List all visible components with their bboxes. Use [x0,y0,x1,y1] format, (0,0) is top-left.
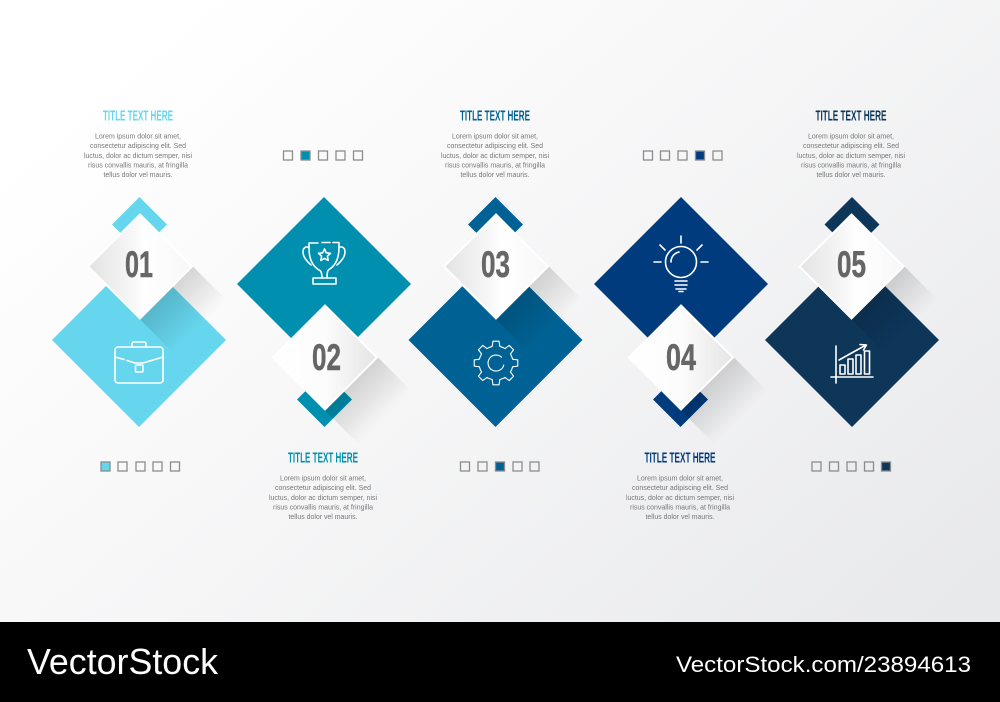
step 4 number: 04 [666,337,696,378]
step 1 title: TITLE TEXT HERE [103,108,173,124]
step 3 chevron [468,197,523,252]
step 4 description: risus convallis mauris, at fringilla [630,502,730,512]
step 5 description: risus convallis mauris, at fringilla [801,160,901,170]
step 3 description [441,132,549,179]
step 2 title: TITLE TEXT HERE [288,450,358,466]
step 2 large diamond [237,197,411,371]
step 1 chevron [112,197,167,252]
step 3 title: TITLE TEXT HERE [460,108,530,124]
step 2 description: consectetur adipiscing elit. Sed [275,483,371,492]
step 1 description: luctus, dolor ac dictum semper, nisi [84,151,192,160]
step 5 description: tellus dolor vel mauris. [816,170,886,179]
footer bar [0,622,1000,702]
step 5 chevron [824,197,880,252]
step 5 number: 05 [837,244,866,285]
footer logo: VectorStock [27,641,219,682]
icon: briefcase [115,342,163,383]
step 2 description [269,474,377,521]
step 5 description: Lorem ipsum dolor sit amet, [808,132,894,140]
step 2 chevron [297,372,352,427]
step 4 [594,151,768,521]
icon: trophy [303,242,345,284]
step 4 title: TITLE TEXT HERE [644,450,716,466]
step 5 [765,108,939,471]
step 5 description: luctus, dolor ac dictum semper, nisi [797,151,905,160]
step 3 description: tellus dolor vel mauris. [460,170,530,179]
step 1 description: consectetur adipiscing elit. Sed [90,141,186,150]
step 2 description: risus convallis mauris, at fringilla [273,502,373,512]
step 2 description: tellus dolor vel mauris. [288,512,358,521]
step 4 progress squares [644,151,722,160]
step 1 large diamond [52,253,226,427]
step 2 description: luctus, dolor ac dictum semper, nisi [269,493,377,502]
step 2 progress squares [284,151,362,160]
step 3 description: consectetur adipiscing elit. Sed [447,141,543,150]
step 2 number diamond [273,306,412,444]
step 5 title: TITLE TEXT HERE [816,108,886,124]
step 1 number: 01 [125,244,153,285]
step 2 description: Lorem ipsum dolor sit amet, [280,474,366,482]
step 3 number: 03 [481,244,510,285]
step 3 progress squares [460,462,539,471]
step 1 description [84,132,192,179]
step 1 progress squares [101,462,180,471]
step 3 description: risus convallis mauris, at fringilla [445,160,545,170]
step 4 description: Lorem ipsum dolor sit amet, [637,474,723,482]
step 4 description: tellus dolor vel mauris. [646,512,714,521]
step 3 large diamond [408,253,582,427]
step 4 chevron [653,372,708,427]
step 4 description: consectetur adipiscing elit. Sed [632,483,728,492]
step 5 description [797,132,905,179]
icon: gear [474,341,518,385]
step 4 large diamond [594,197,768,371]
step 1 number diamond [88,214,227,354]
step 4 number diamond [629,306,768,444]
step 5 progress squares [812,462,890,471]
step 1 description: tellus dolor vel mauris. [104,170,172,179]
step 4 description [626,474,734,521]
step 5 description: consectetur adipiscing elit. Sed [803,141,899,150]
step 3 description: luctus, dolor ac dictum semper, nisi [441,151,549,160]
step 1 description: risus convallis mauris, at fringilla [88,160,188,170]
step 2 number: 02 [312,337,341,378]
step 1 description: Lorem ipsum dolor sit amet, [95,132,181,140]
step 5 large diamond [765,253,939,427]
step 5 number diamond [800,214,938,354]
step 4 description: luctus, dolor ac dictum semper, nisi [626,493,734,502]
step 3 description: Lorem ipsum dolor sit amet, [452,132,538,140]
step 2 [237,151,412,521]
step 3 number diamond [444,214,583,354]
step 3 [408,108,583,471]
step 1 [52,108,227,471]
footer image id: VectorStock.com/23894613 [676,652,971,677]
icon: bar chart [831,344,873,383]
icon: light bulb [654,236,708,292]
